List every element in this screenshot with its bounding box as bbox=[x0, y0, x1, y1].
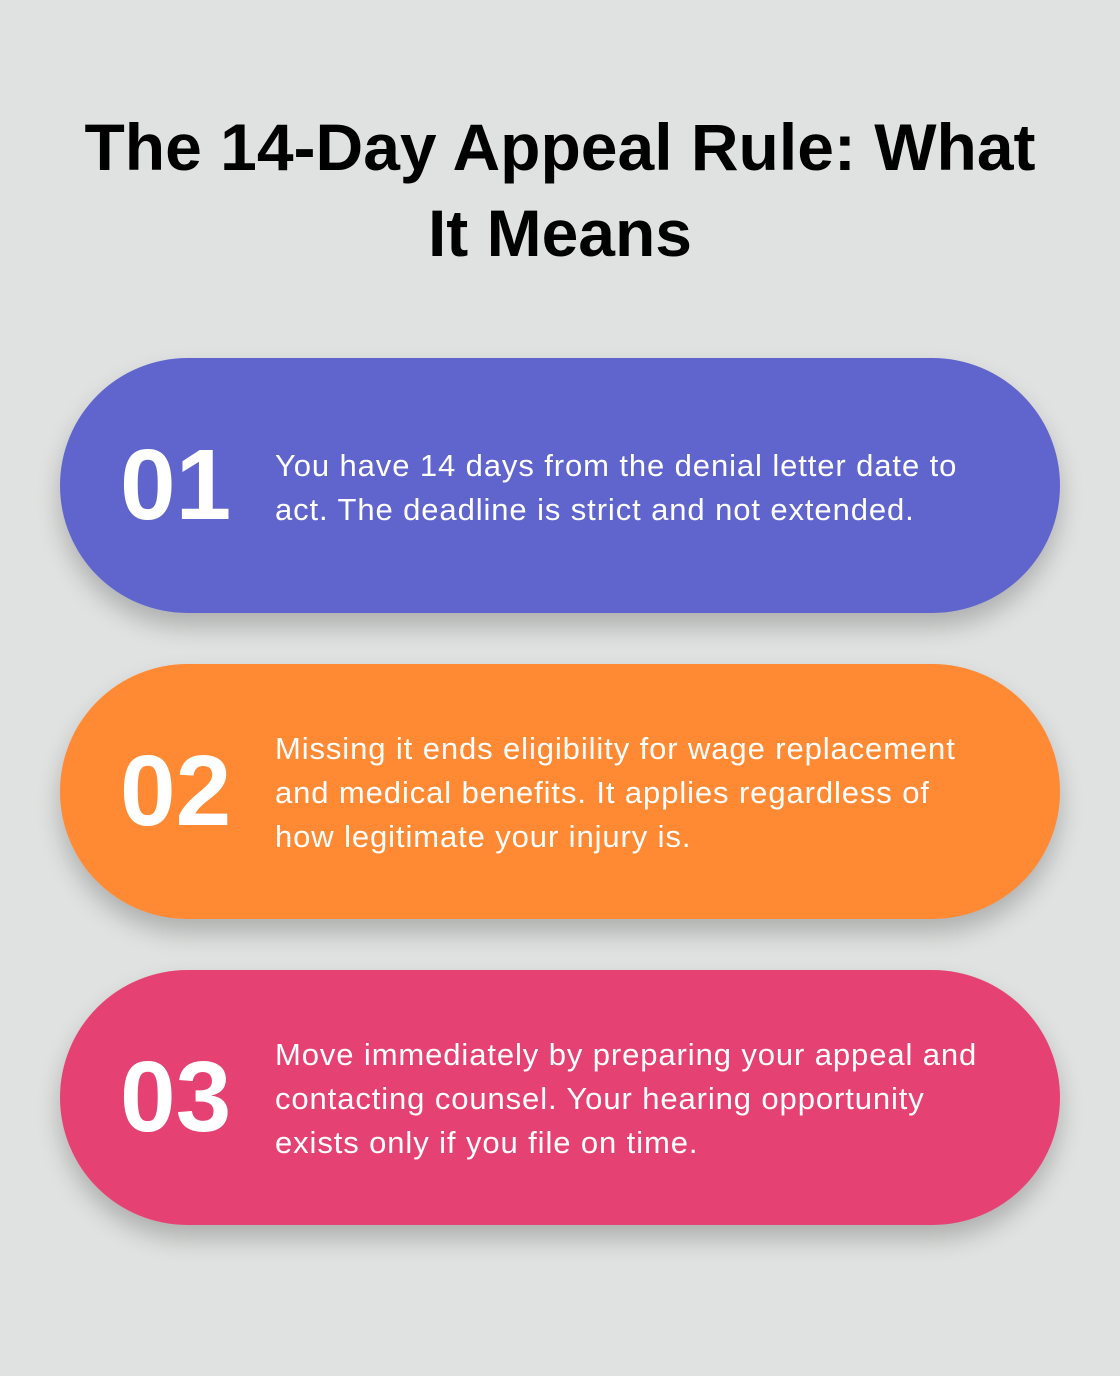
text 01: act. The deadline is strict and not extended. bbox=[275, 492, 915, 527]
title: It Means bbox=[428, 196, 692, 270]
text 01 bbox=[275, 448, 957, 527]
text 03: contacting counsel. Your hearing opportunity bbox=[275, 1081, 925, 1116]
text 03 bbox=[275, 1037, 977, 1160]
text 03: exists only if you file on time. bbox=[275, 1125, 698, 1160]
title bbox=[84, 110, 1036, 270]
number 03: 03 bbox=[120, 1041, 231, 1153]
text 02: how legitimate your injury is. bbox=[275, 819, 691, 854]
panel: step 03 bbox=[60, 970, 1060, 1225]
number 02: 02 bbox=[120, 735, 231, 847]
text 02: Missing it ends eligibility for wage replacement bbox=[275, 731, 956, 766]
title: The 14-Day Appeal Rule: What bbox=[84, 110, 1036, 184]
text 03: Move immediately by preparing your appeal and bbox=[275, 1037, 977, 1072]
panel: step 02 bbox=[60, 664, 1060, 919]
text 02 bbox=[275, 731, 956, 854]
text 01: You have 14 days from the denial letter date to bbox=[275, 448, 957, 483]
panel: step 01 bbox=[60, 358, 1060, 613]
number 01: 01 bbox=[120, 429, 231, 541]
text 02: and medical benefits. It applies regardless of bbox=[275, 775, 930, 810]
